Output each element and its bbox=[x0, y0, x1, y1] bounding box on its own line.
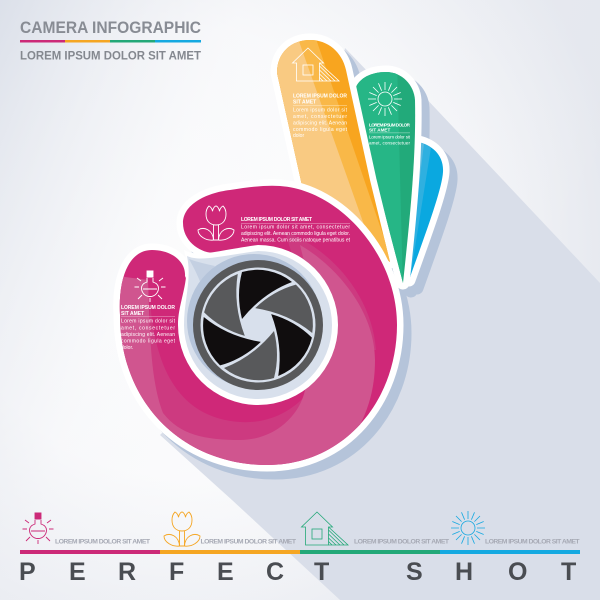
finger: blue bbox=[400, 135, 443, 285]
legend: house: LOREM IPSUM DOLOR SIT AMET bbox=[354, 538, 450, 546]
orange text block: LOREM IPSUM DOLOR bbox=[293, 94, 347, 100]
orange text block bbox=[293, 94, 348, 139]
legend: bulb bbox=[22, 513, 151, 546]
green text block: amet, consectetuer bbox=[369, 140, 410, 146]
green text block: LOREM IPSUM DOLOR bbox=[369, 122, 411, 128]
left lobe text block: dolor. bbox=[121, 345, 133, 351]
orange text block: SIT AMET bbox=[293, 100, 316, 106]
header: title: CAMERA INFOGRAPHIC bbox=[20, 19, 201, 37]
icon: tulip bbox=[198, 206, 234, 240]
left lobe text block: commodo ligula eget bbox=[121, 338, 176, 344]
header: title bbox=[20, 19, 202, 62]
camera lens bbox=[178, 245, 338, 405]
green text block: SIT AMET bbox=[369, 128, 390, 132]
upper lobe text block bbox=[241, 217, 351, 244]
panel: pink spiral bbox=[120, 183, 404, 472]
orange text block: amet, consectetuer bbox=[293, 114, 347, 120]
finger: orange bbox=[277, 34, 392, 268]
left lobe text block: Lorem ipsum dolor sit bbox=[121, 319, 176, 325]
left lobe text block: SIT AMET bbox=[121, 311, 144, 317]
long diagonal shadow bbox=[160, 48, 600, 600]
legend: tulip bbox=[164, 512, 297, 546]
green text block bbox=[369, 122, 411, 146]
legend: tulip: LOREM IPSUM DOLOR SIT AMET bbox=[200, 538, 297, 546]
left lobe text block: LOREM IPSUM DOLOR bbox=[121, 305, 175, 311]
orange text block: commodo ligula eget bbox=[293, 127, 348, 133]
slogan: PERFECT SHOT bbox=[19, 558, 576, 586]
legend: house bbox=[302, 512, 450, 546]
header: title: LOREM IPSUM DOLOR SIT AMET bbox=[20, 48, 202, 62]
bottom colour bar bbox=[20, 550, 580, 554]
left lobe text block: amet, consectetuer bbox=[121, 326, 175, 332]
orange text block: Lorem ipsum dolor sit bbox=[293, 108, 348, 114]
upper lobe text block: LOREM IPSUM DOLOR SIT AMET bbox=[241, 217, 312, 223]
orange text block: dolor bbox=[293, 133, 304, 139]
icon: light bulb bbox=[134, 271, 166, 302]
icon: house bbox=[292, 48, 339, 81]
legend: sun: LOREM IPSUM DOLOR SIT AMET bbox=[485, 538, 580, 546]
upper lobe text block: adipiscing elit. Aenean commodo ligula eget dolor. bbox=[241, 231, 350, 237]
upper lobe text block: Aenean massa. Cum sociis natoque penatibus et bbox=[241, 238, 351, 244]
legend: bulb: LOREM IPSUM DOLOR SIT AMET bbox=[55, 538, 151, 546]
left lobe text block: adipiscing elit. Aenean bbox=[121, 332, 175, 338]
orange text block: adipiscing elit. Aenean bbox=[293, 120, 347, 126]
finger: green bbox=[354, 66, 422, 290]
green text block: Lorem ipsum dolor sit bbox=[369, 134, 411, 140]
icon: sun bbox=[368, 82, 402, 116]
aperture blades bbox=[193, 268, 323, 382]
legend: sun bbox=[451, 511, 580, 546]
upper lobe text block: Lorem ipsum dolor sit amet, consectetuer bbox=[241, 225, 350, 231]
drop shadow of the hand shape bbox=[128, 48, 451, 473]
left lobe text block bbox=[121, 305, 176, 351]
